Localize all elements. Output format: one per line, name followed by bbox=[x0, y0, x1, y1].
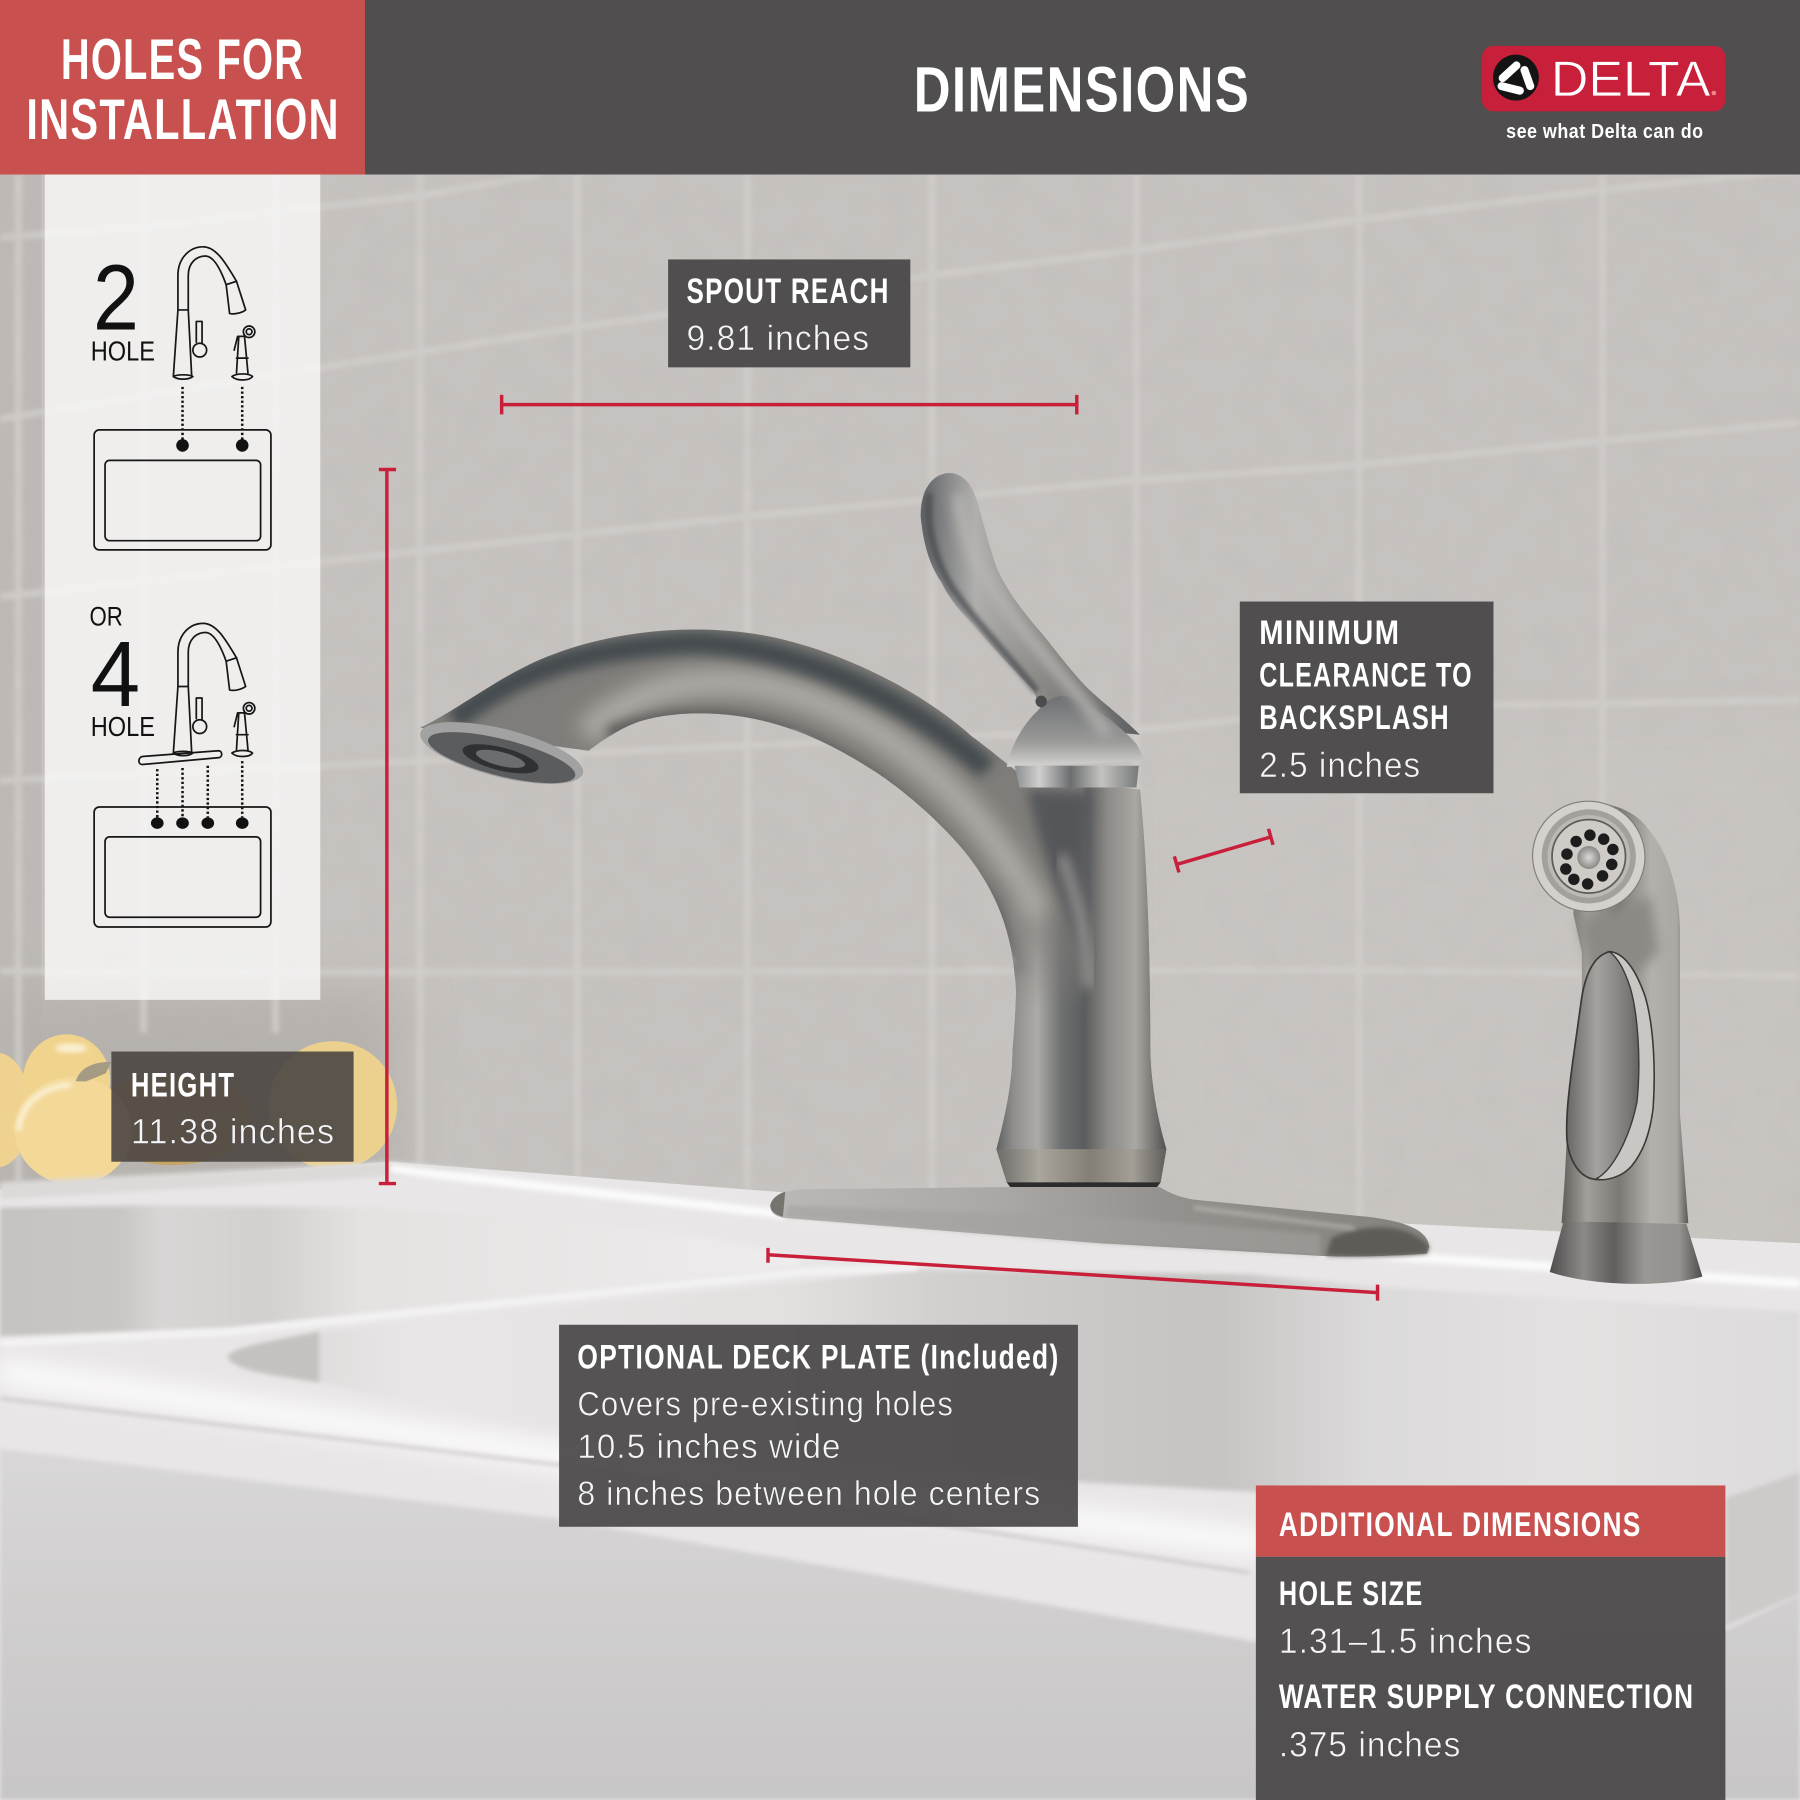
panel: additional dimensions bbox=[1256, 1485, 1725, 1800]
title: dimensions: DIMENSIONS bbox=[914, 53, 1250, 125]
label: or 4 hole bbox=[90, 602, 155, 742]
heading: additional dimensions bbox=[1256, 1485, 1725, 1557]
icon: 2-hole faucet and sprayer bbox=[173, 247, 255, 380]
handle bbox=[921, 473, 1143, 767]
dimension line: height bbox=[379, 470, 396, 1184]
label: or 4 hole: HOLE bbox=[91, 711, 155, 742]
spout and column bbox=[420, 630, 1182, 1194]
callout: optional deck plate bbox=[559, 1325, 1078, 1527]
heading: holes for installation: INSTALLATION bbox=[26, 88, 340, 152]
callout: optional deck plate: 8 inches between hole centers bbox=[577, 1475, 1041, 1513]
header bar bbox=[0, 0, 1800, 174]
callout: height bbox=[111, 1052, 354, 1162]
callout: optional deck plate: 10.5 inches wide bbox=[577, 1428, 841, 1466]
callout: minimum clearance: 2.5 inches bbox=[1259, 745, 1421, 785]
callout: optional deck plate: OPTIONAL DECK PLATE (Included) bbox=[577, 1338, 1060, 1376]
callout: minimum clearance bbox=[1240, 602, 1493, 793]
callout: minimum clearance: MINIMUM bbox=[1259, 614, 1401, 652]
deck plate bbox=[770, 1187, 1429, 1257]
heading: holes for installation: HOLES FOR bbox=[61, 28, 304, 92]
callout: height: HEIGHT bbox=[131, 1066, 235, 1104]
sink and countertop bbox=[0, 1162, 1800, 1800]
logo: delta bbox=[1482, 46, 1725, 143]
callout: minimum clearance: BACKSPLASH bbox=[1259, 699, 1450, 737]
callout: spout reach: 9.81 inches bbox=[686, 318, 870, 358]
tomatoes on counter bbox=[0, 1034, 397, 1185]
faucet bbox=[415, 473, 1182, 1194]
label: or 4 hole: 4 bbox=[91, 622, 140, 726]
aerator bbox=[415, 709, 589, 797]
dimension line: minimum clearance bbox=[1174, 829, 1273, 872]
label: 2 hole: 2 bbox=[93, 245, 139, 349]
background: tiled wall bbox=[0, 0, 1800, 1286]
callout: optional deck plate: Covers pre-existing holes bbox=[577, 1385, 954, 1423]
sprayer base bbox=[1550, 1221, 1702, 1284]
hole size: 1.31–1.5 inches bbox=[1279, 1621, 1533, 1661]
water supply connection: .375 inches bbox=[1279, 1724, 1461, 1764]
water supply connection bbox=[1279, 1678, 1694, 1764]
panel: hole options bbox=[45, 174, 320, 1000]
callout: spout reach: SPOUT REACH bbox=[686, 271, 890, 311]
callout: height: 11.38 inches bbox=[131, 1111, 335, 1151]
hole size: HOLE SIZE bbox=[1279, 1575, 1423, 1613]
side sprayer bbox=[1520, 789, 1702, 1284]
label: or 4 hole: OR bbox=[90, 602, 123, 632]
hole size bbox=[1279, 1575, 1533, 1661]
sprayer body bbox=[1562, 803, 1688, 1223]
icon: 4-hole sink diagram bbox=[94, 761, 271, 927]
sprayer head bbox=[1520, 789, 1657, 924]
logo: delta: see what Delta can do bbox=[1506, 120, 1704, 143]
heading: holes for installation bbox=[26, 28, 340, 152]
dimension line: spout reach bbox=[502, 395, 1077, 414]
sprayer trigger bbox=[1567, 952, 1654, 1180]
collar bbox=[1015, 766, 1139, 788]
icon: 4-hole faucet, deck plate and sprayer bbox=[139, 623, 255, 765]
label: 2 hole: HOLE bbox=[91, 335, 155, 366]
callout: minimum clearance: CLEARANCE TO bbox=[1259, 656, 1473, 694]
heading: additional dimensions: ADDITIONAL DIMENSIONS bbox=[1279, 1506, 1642, 1544]
dimension line: deck plate bbox=[768, 1248, 1378, 1301]
panel: holes heading background bbox=[0, 0, 365, 174]
label: 2 hole bbox=[91, 245, 155, 366]
callout: spout reach bbox=[668, 259, 910, 367]
icon: 2-hole sink diagram bbox=[94, 387, 271, 550]
logo: delta: DELTA bbox=[1551, 50, 1711, 107]
